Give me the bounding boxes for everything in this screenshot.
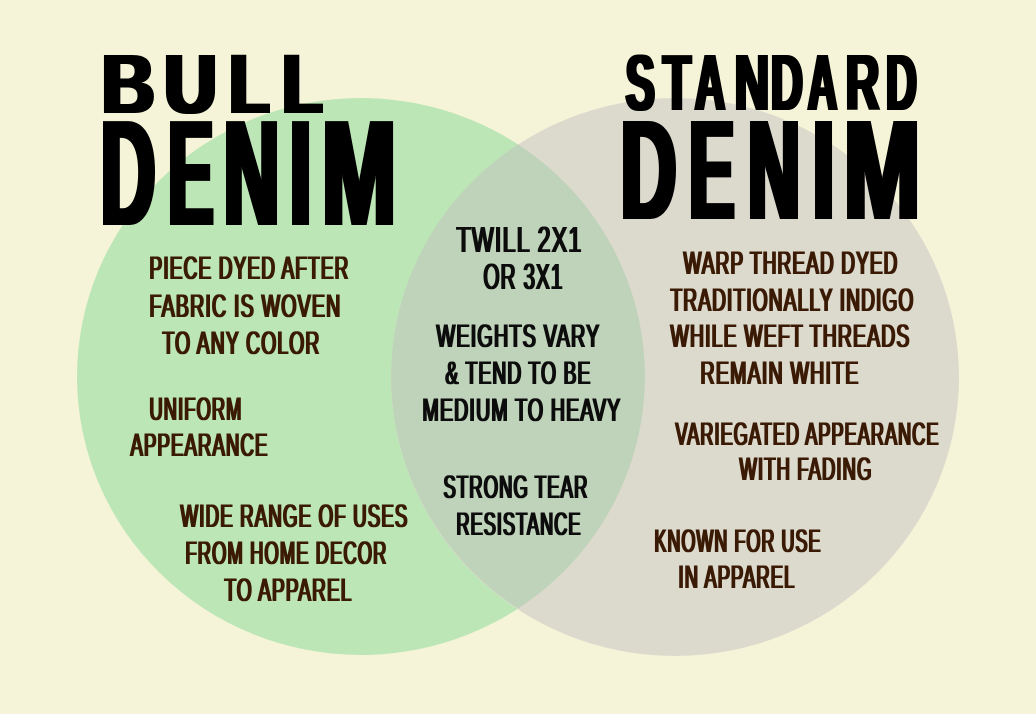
title word: standard [626,37,917,128]
title word: standard: S [626,38,655,127]
text: standard denim uses [654,523,822,595]
text: shared tear resistance: RESISTANCE [456,506,582,542]
title word: denim: D [621,92,676,250]
title word: bull: B [102,37,154,131]
title word: denim: E [168,88,213,257]
title word: denim: I [290,90,311,258]
circle: standard denim [391,98,959,656]
text: shared weave: TWILL 2X1 [456,219,582,260]
title word: denim: N [224,90,279,258]
text: bull denim appearance: APPEARANCE [130,427,268,463]
text: bull denim appearance [130,391,268,463]
text: standard denim appearance [676,416,940,487]
title word: denim [101,88,396,258]
title word: denim: M [322,90,396,258]
text: shared weights: WEIGHTS VARY [436,318,600,354]
text: bull denim dyeing: FABRIC IS WOVEN [150,288,342,324]
title word: standard: D [771,38,803,127]
title: standard denim [621,37,920,250]
text: bull denim appearance: UNIFORM [150,391,242,427]
text: bull denim uses: WIDE RANGE OF USES [180,498,408,534]
title word: bull: L [230,37,269,131]
text: shared weave: OR 3X1 [484,256,564,297]
title word: denim: I [813,92,834,250]
text: standard denim uses: KNOWN FOR USE [654,523,822,559]
title: bull denim [101,37,396,258]
title word: standard: A [695,37,725,128]
venn diagram [77,98,959,656]
title word: standard: A [808,39,837,128]
text: shared weights [422,318,622,428]
title word: standard: T [663,38,691,127]
title word: denim: M [844,92,920,250]
title word: standard: N [735,37,769,127]
title word: standard: R [846,38,879,127]
text: standard denim appearance: WITH FADING [740,451,872,487]
text: bull denim dyeing: PIECE DYED AFTER [150,250,350,286]
title word: bull: U [165,37,216,131]
text: shared weights: MEDIUM TO HEAVY [422,392,622,428]
text: shared weights: & TEND TO BE [446,355,592,391]
title word: bull [102,37,322,131]
title word: denim: D [101,89,155,258]
title word: denim [621,90,920,250]
circle: bull denim [77,98,645,655]
text: standard denim dyeing [670,245,914,391]
overlap region [391,144,645,608]
title word: bull: L [283,37,322,131]
title word: denim: E [690,90,734,250]
text: standard denim uses: IN APPAREL [678,559,796,595]
text: bull denim uses: TO APPAREL [224,572,352,608]
text: bull denim uses [180,498,408,608]
title word: standard: D [886,38,917,127]
text: standard denim dyeing: REMAIN WHITE [700,355,860,391]
text: shared tear resistance [444,469,588,542]
text: shared weave [456,219,582,297]
text: shared tear resistance: STRONG TEAR [444,469,588,505]
text: bull denim uses: FROM HOME DECOR [186,535,388,571]
text: bull denim dyeing: TO ANY COLOR [162,325,320,361]
title word: denim: N [748,90,800,249]
text: bull denim dyeing [150,250,350,361]
